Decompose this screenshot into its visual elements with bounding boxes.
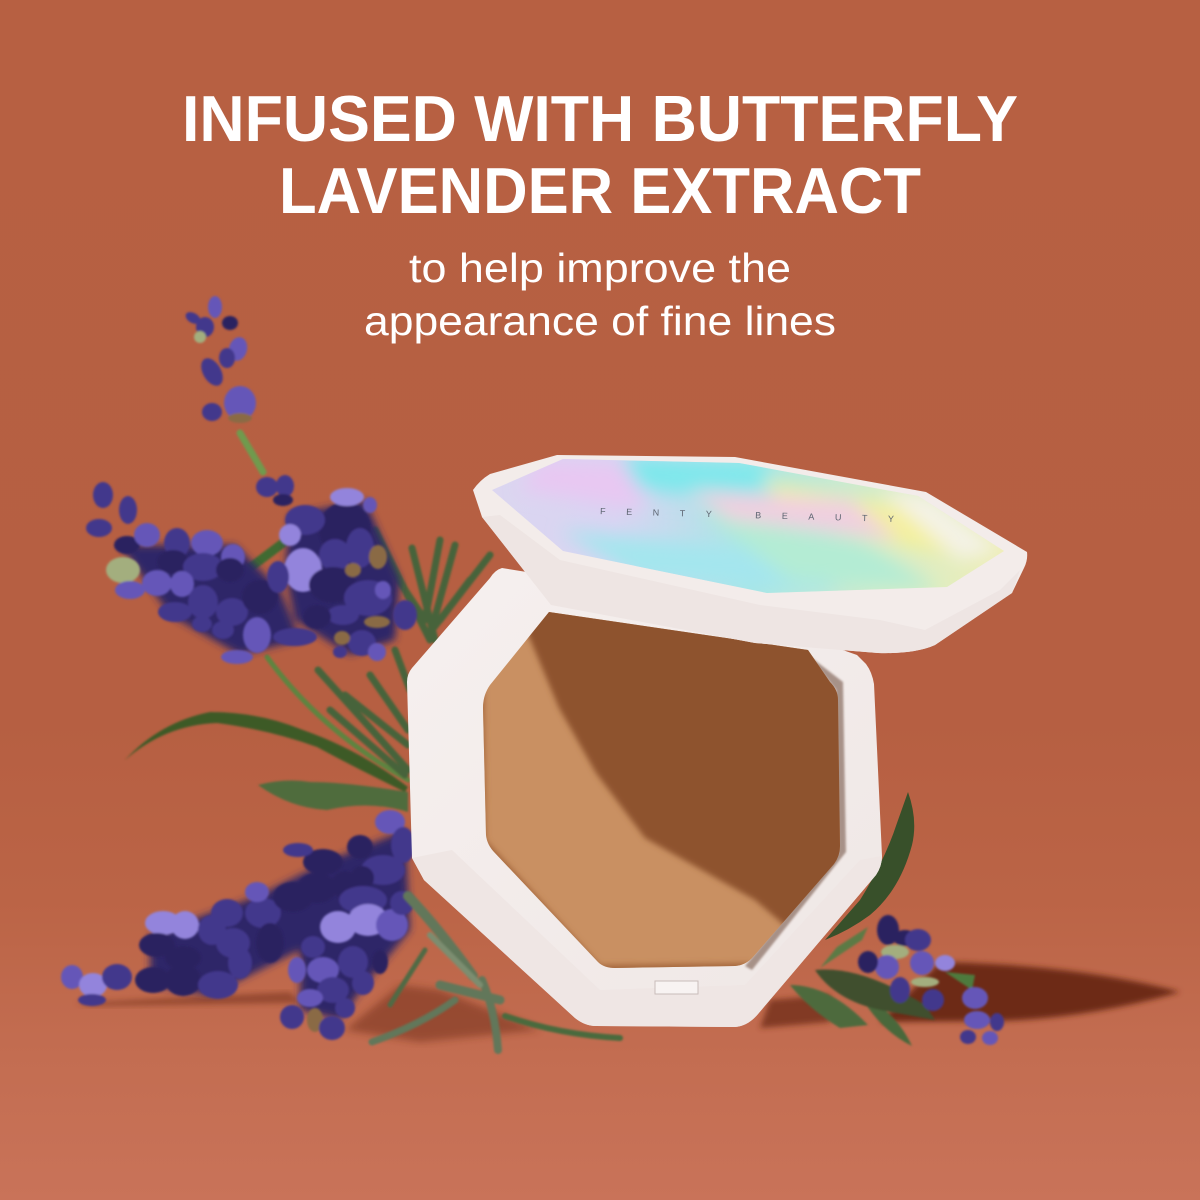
holographic panel — [492, 459, 1004, 593]
rosemary sprigs behind compact — [240, 433, 490, 780]
rosemary sprigs in front of compact — [372, 896, 620, 1050]
lavender: right cluster — [267, 488, 417, 661]
title: INFUSED WITH BUTTERFLY — [182, 82, 1018, 155]
base lower facet — [412, 850, 882, 1027]
pan well shadow — [745, 655, 846, 970]
subtitle: appearance of fine lines — [364, 298, 836, 344]
compact base — [407, 568, 882, 1027]
lid side shading — [482, 515, 1020, 653]
lavender: lower-left sprigs — [61, 810, 415, 1040]
lavender underlay masses — [120, 500, 410, 1020]
hinge slot — [655, 981, 698, 994]
right leaf behind compact — [825, 792, 914, 940]
title — [182, 82, 1018, 227]
pan of bronzer — [483, 612, 840, 968]
compact lid — [473, 450, 1027, 653]
lavender: left spike — [86, 482, 317, 664]
long leaves — [125, 712, 408, 812]
subtitle: to help improve the — [409, 245, 791, 291]
subtitle — [364, 245, 836, 344]
brand name on lid: FENTY BEAUTY — [600, 506, 894, 524]
title: LAVENDER EXTRACT — [279, 154, 921, 227]
lavender and leaves: right sprig — [790, 915, 1004, 1046]
cast shadows on the ground — [75, 962, 1180, 1042]
lavender: top sprig — [184, 296, 294, 506]
